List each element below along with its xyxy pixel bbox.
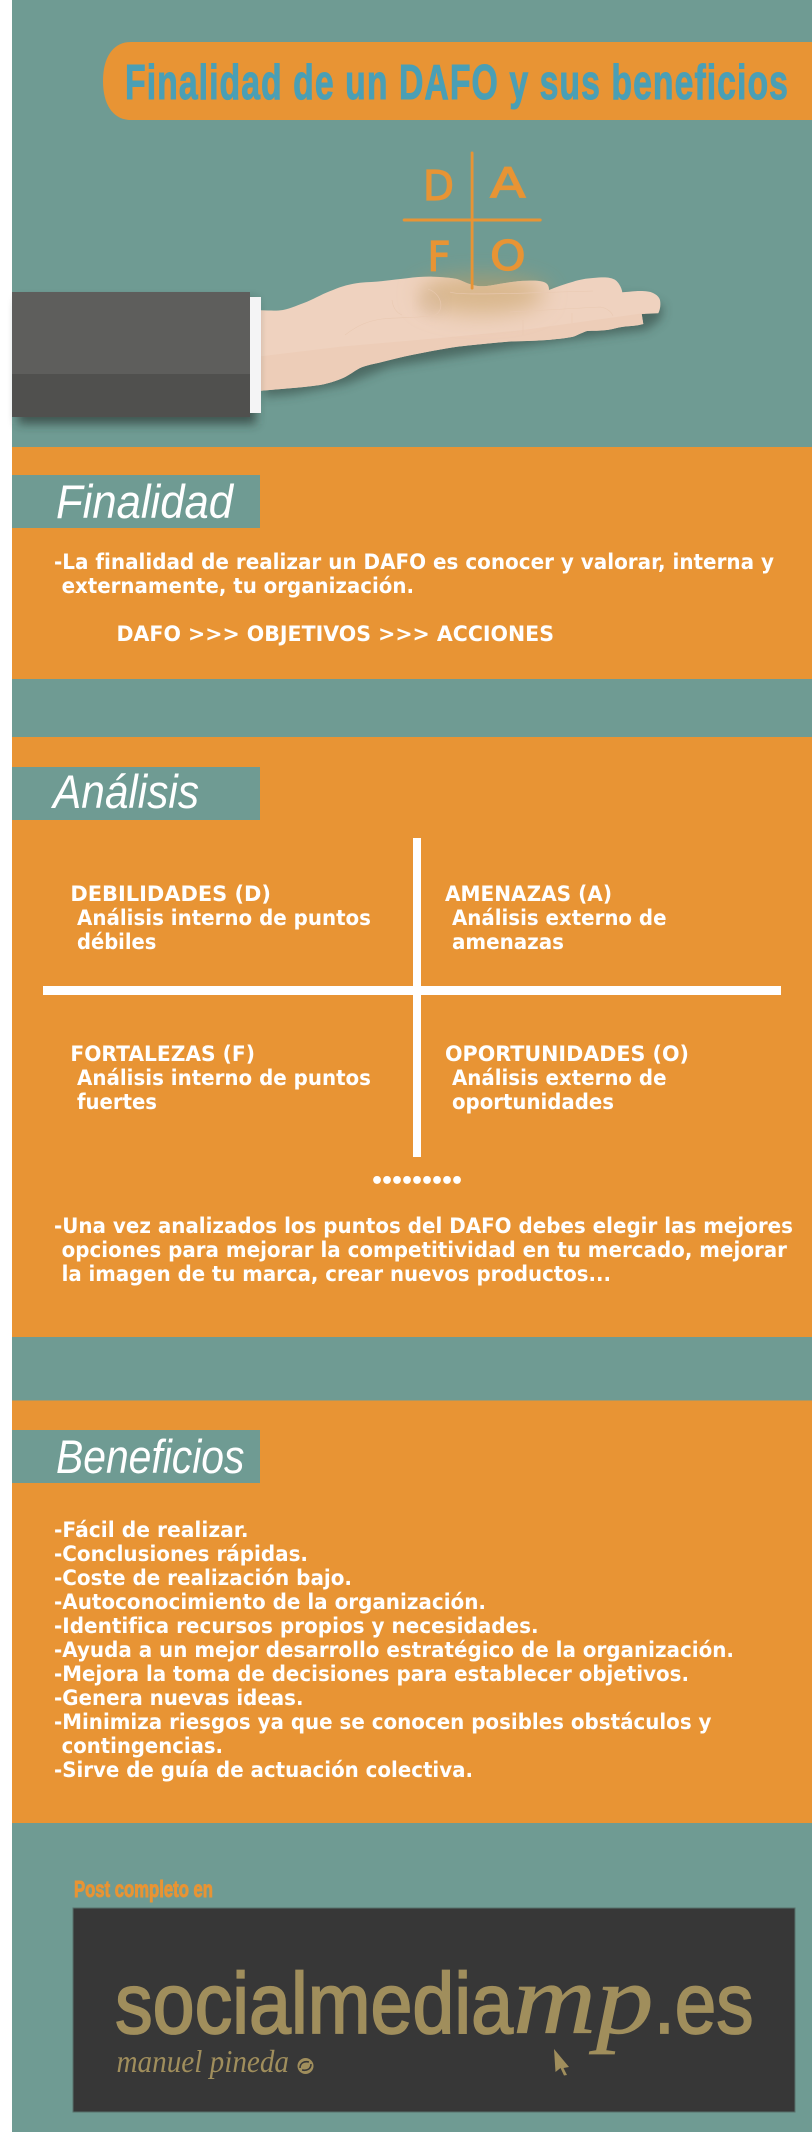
quadrant: oportunidades — [445, 1042, 689, 1114]
icon: jacket sleeve — [12, 292, 250, 417]
quadrant: fortalezas: fuertes — [77, 1090, 157, 1114]
quadrant: oportunidades: oportunidades — [452, 1090, 614, 1114]
dotted separator: ••••••••• — [370, 1169, 464, 1194]
text block: benefits list: -Fácil de realizar. — [54, 1518, 249, 1542]
text block: benefits list: -Conclusiones rápidas. — [54, 1542, 308, 1566]
text block: next steps: -Una vez analizados los puntos del DAFO debes elegir las mejores — [54, 1214, 793, 1238]
text block: purpose — [54, 550, 774, 598]
icon: recycle badge — [298, 2058, 314, 2074]
icon: shirt cuff — [250, 297, 261, 413]
text block: benefits list: -Coste de realización bajo. — [54, 1566, 352, 1590]
text block: purpose: externamente, tu organización. — [62, 574, 414, 598]
text block: benefits list: -Ayuda a un mejor desarrollo estratégico de la organización. — [54, 1638, 734, 1662]
text block: benefits list — [54, 1518, 734, 1782]
icon: glow above palm — [414, 275, 550, 309]
logo wordmark: socialmedia — [115, 1956, 513, 2052]
text block: benefits list: -Autoconocimiento de la organización. — [54, 1590, 486, 1614]
heading tab: Análisis — [12, 765, 260, 820]
quadrant: debilidades: DEBILIDADES (D) — [70, 882, 271, 906]
icon: DAFO cross: O — [490, 232, 526, 280]
text block: benefits list: -Sirve de guía de actuación colectiva. — [54, 1758, 473, 1782]
quadrant: amenazas: amenazas — [452, 930, 564, 954]
text block: purpose: -La finalidad de realizar un DAFO es conocer y valorar, interna y — [54, 550, 774, 574]
panel: Finalidad — [12, 447, 812, 679]
quadrant: fortalezas: Análisis interno de puntos — [77, 1066, 371, 1090]
quadrant: oportunidades: OPORTUNIDADES (O) — [445, 1042, 689, 1066]
matrix vertical bar — [413, 838, 421, 1157]
quadrant: debilidades: débiles — [77, 930, 156, 954]
logo wordmark suffix: .es — [654, 1956, 754, 2052]
icon: mouse cursor — [554, 2049, 569, 2076]
icon: hand shadow — [264, 296, 663, 397]
icon: DAFO cross: A — [490, 159, 526, 207]
panel: Análisis — [12, 737, 812, 1337]
heading tab: Análisis: Análisis — [50, 765, 199, 818]
text: process: DAFO >>> OBJETIVOS >>> ACCIONES — [116, 622, 554, 646]
quadrant: amenazas: AMENAZAS (A) — [445, 882, 612, 906]
text block: next steps: opciones para mejorar la competitividad en tu mercado, mejorar — [62, 1238, 788, 1262]
text block: next steps: la imagen de tu marca, crear nuevos productos... — [62, 1262, 611, 1286]
text block: benefits list: contingencias. — [62, 1734, 223, 1758]
illustration: hand holding DAFO — [12, 152, 665, 424]
icon: sleeve shadow — [18, 300, 256, 424]
logo wordmark italic part: mp — [513, 1944, 654, 2055]
text block: benefits list: -Identifica recursos propios y necesidades. — [54, 1614, 539, 1638]
quadrant: fortalezas: FORTALEZAS (F) — [70, 1042, 255, 1066]
label: post completo en: Post completo en — [74, 1876, 213, 1902]
icon: DAFO cross: D — [423, 162, 454, 210]
icon: DAFO cross — [403, 152, 542, 290]
quadrant: oportunidades: Análisis externo de — [452, 1066, 666, 1090]
icon: DAFO cross: F — [428, 233, 450, 281]
quadrant: debilidades — [70, 882, 371, 954]
text block: benefits list: -Minimiza riesgos ya que se conocen posibles obstáculos y — [54, 1710, 712, 1734]
title pill — [103, 42, 812, 120]
text block: benefits list: -Mejora la toma de decisiones para establecer objetivos. — [54, 1662, 689, 1686]
text block: benefits list: -Genera nuevas ideas. — [54, 1686, 304, 1710]
text block: next steps — [54, 1214, 793, 1286]
matrix horizontal bar — [43, 986, 781, 995]
icon: hand — [261, 276, 660, 391]
title banner — [103, 42, 812, 120]
quadrant: amenazas — [445, 882, 666, 954]
logo byline: manuel pineda — [116, 2043, 289, 2079]
heading tab: Finalidad: Finalidad — [56, 475, 235, 528]
quadrant: debilidades: Análisis interno de puntos — [77, 906, 371, 930]
panel: Beneficios — [12, 1400, 812, 1823]
quadrant: amenazas: Análisis externo de — [452, 906, 666, 930]
logo card: socialmediamp.es — [73, 1908, 795, 2112]
quadrant: fortalezas — [70, 1042, 371, 1114]
heading tab: Beneficios: Beneficios — [56, 1430, 244, 1483]
